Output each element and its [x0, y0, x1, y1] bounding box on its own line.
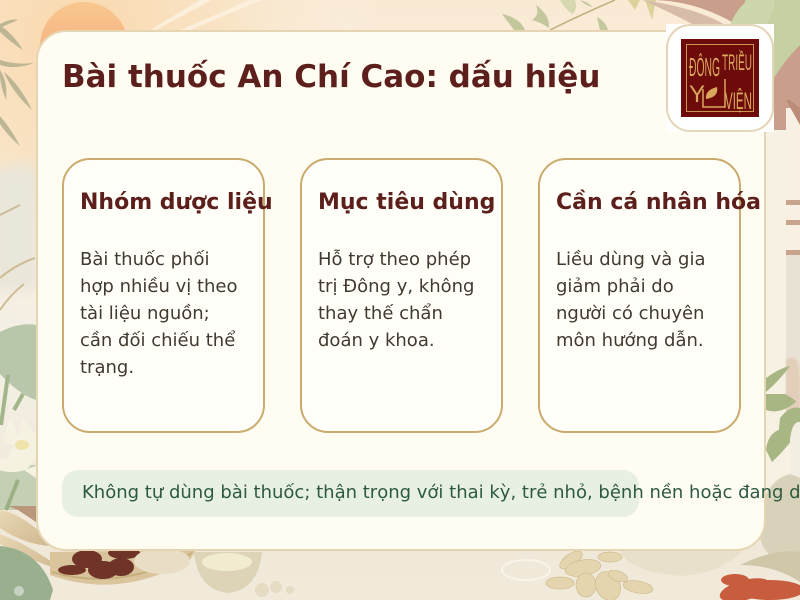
- card body: đoán y khoa.: [318, 330, 435, 351]
- card heading: Nhóm dược liệu: [80, 190, 273, 215]
- card body: Hỗ trợ theo phép: [318, 249, 471, 270]
- left lotus leaf: [0, 324, 36, 400]
- bamboo leaves: [0, 20, 34, 146]
- top center sprig: [502, 0, 656, 30]
- sun rays: [150, 0, 262, 30]
- warning note background: [62, 470, 639, 517]
- main panel: [36, 30, 766, 551]
- card body: tài liệu nguồn;: [80, 303, 210, 324]
- card: mục tiêu dùng: [300, 158, 503, 433]
- herbal compress: [758, 422, 800, 555]
- logo frame: [666, 24, 774, 132]
- right foliage: [766, 366, 800, 462]
- lotus leaf with droplet: [0, 546, 53, 600]
- card body: trạng.: [80, 357, 134, 378]
- right window wall: [766, 130, 800, 550]
- logo badge: [666, 24, 774, 132]
- herb slices: [546, 548, 654, 600]
- title: Bài thuốc An Chí Cao: dấu hiệu: [62, 59, 600, 95]
- ginseng root: [0, 510, 66, 572]
- lotus seeds: [134, 548, 190, 574]
- card body: [318, 249, 474, 351]
- sun: [40, 2, 128, 90]
- dried roots: [740, 551, 800, 582]
- card body: [80, 249, 238, 378]
- jujube dates: [58, 547, 140, 579]
- water ripple: [502, 560, 550, 580]
- card body: trị Đông y, không: [318, 276, 474, 297]
- top right leaf: [745, 0, 800, 78]
- lotus flower centre: [15, 440, 29, 450]
- card body: thay thế chẩn: [318, 303, 443, 324]
- card: cần cá nhân hóa: [538, 158, 741, 433]
- card body: Liều dùng và gia: [556, 249, 705, 270]
- woven basket: [50, 550, 196, 585]
- distant mountains: [0, 164, 38, 290]
- card body: người có chuyên: [556, 303, 704, 324]
- lotus flower: [0, 417, 36, 478]
- bowl of slices: [620, 551, 742, 576]
- logo seal: [681, 39, 759, 117]
- card heading: Mục tiêu dùng: [318, 190, 495, 215]
- logo seal: Y: [689, 81, 705, 108]
- card body: cần đối chiếu thể: [80, 330, 235, 351]
- card body: Bài thuốc phối: [80, 249, 209, 270]
- grass stalks: [0, 205, 35, 310]
- card heading: Cần cá nhân hóa: [556, 190, 761, 215]
- card body: môn hướng dẫn.: [556, 330, 704, 351]
- card body: hợp nhiều vị theo: [80, 276, 238, 297]
- goji berries: [717, 574, 800, 600]
- top right arch: [650, 0, 800, 135]
- card body: [556, 249, 705, 351]
- card body: giảm phải do: [556, 276, 674, 297]
- tea bowl: [194, 552, 262, 593]
- card: nhóm dược liệu: [62, 158, 265, 433]
- seeds on table: [255, 581, 294, 597]
